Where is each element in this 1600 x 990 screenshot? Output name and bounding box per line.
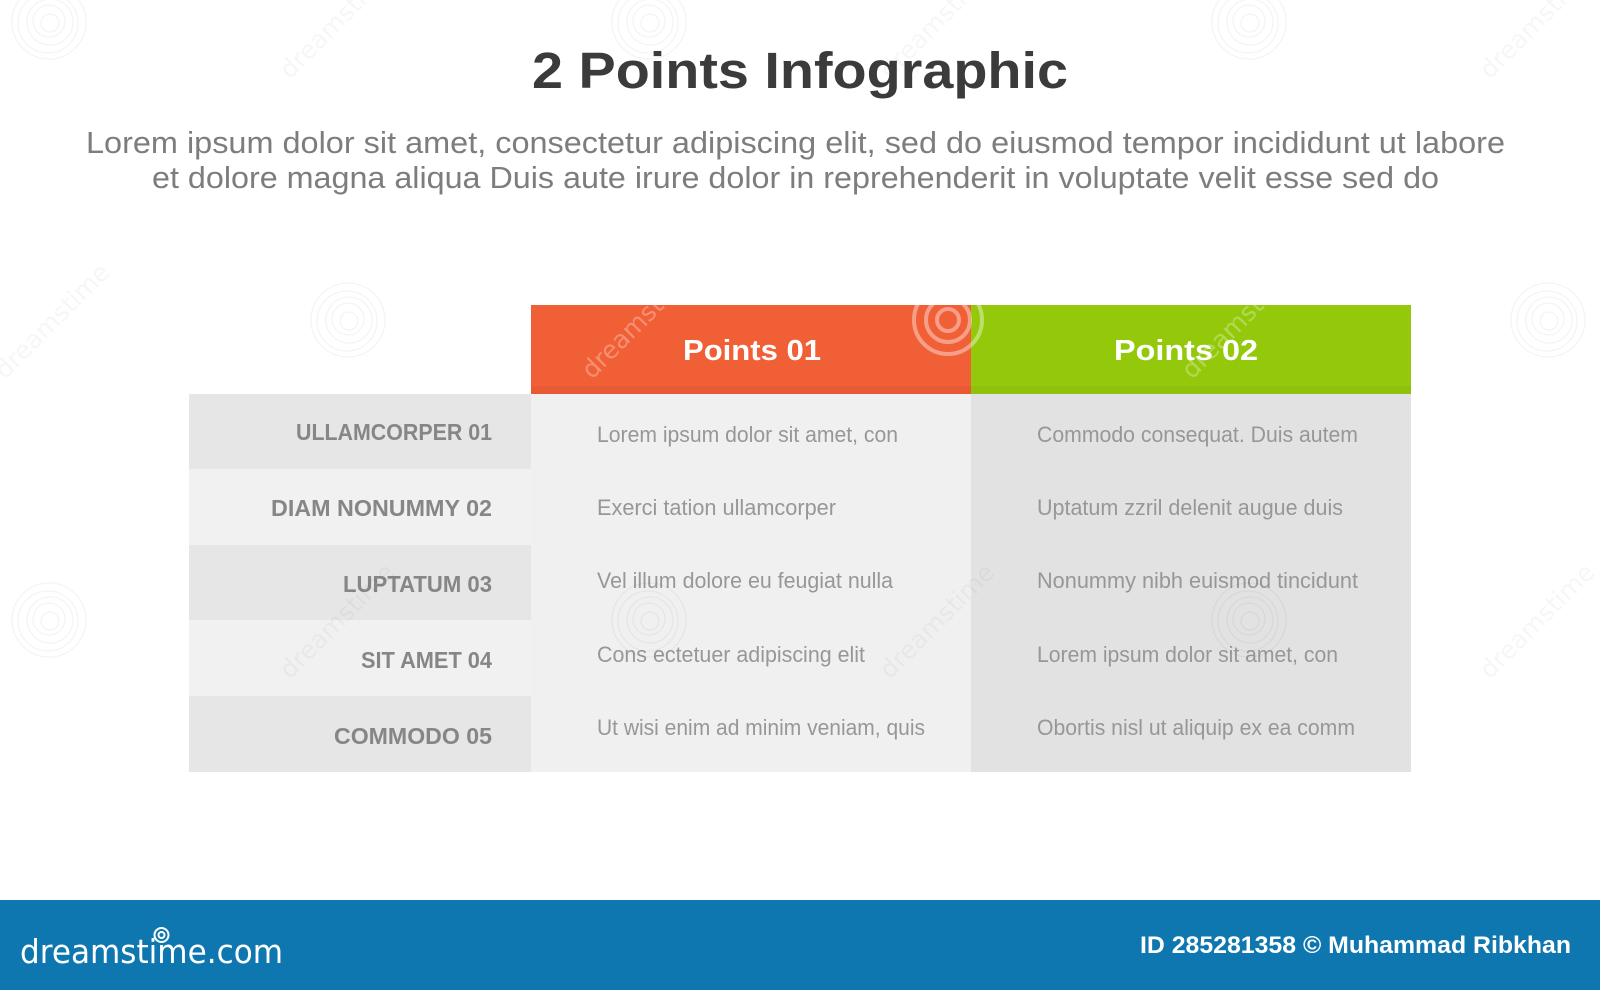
column: Points 01 text [597, 422, 925, 740]
title: 2 Points Infographic [532, 42, 1068, 99]
watermark [0, 0, 1600, 684]
footer bar [0, 900, 1600, 990]
column: Points 02 text: Obortis nisl ut aliquip ex ea comm [1037, 715, 1355, 740]
column: Points 01 text: Ut wisi enim ad minim veniam, quis [597, 715, 925, 740]
header: Points 01: Points 01 [683, 335, 821, 367]
row labels: ULLAMCORPER 01 [296, 419, 492, 445]
column: Points 02 text: Lorem ipsum dolor sit amet, con [1037, 642, 1338, 667]
subtitle: Lorem ipsum dolor sit amet, consectetur adipiscing elit, sed do eiusmod tempor incididunt ut labore [86, 125, 1505, 160]
watermark: dreamstime [1474, 558, 1600, 684]
subtitle: et dolore magna aliqua Duis aute irure dolor in reprehenderit in voluptate velit esse sed do [152, 160, 1439, 195]
watermark: dreamstime [274, 558, 400, 684]
column: Points 01 text: Exerci tation ullamcorper [597, 495, 836, 520]
row labels [271, 419, 492, 749]
watermark: dreamstime [1176, 258, 1302, 384]
header: Points 01 [531, 305, 971, 394]
header: Points 02 [971, 305, 1411, 394]
row labels: COMMODO 05 [334, 723, 492, 749]
column: Points 01 text: Cons ectetuer adipiscing elit [597, 642, 866, 667]
header: Points 02: Points 02 [1114, 335, 1258, 367]
watermark: dreamstime [576, 258, 702, 384]
row labels: DIAM NONUMMY 02 [271, 495, 492, 521]
table body [189, 394, 1411, 772]
column: Points 02 text: Commodo consequat. Duis autem [1037, 422, 1358, 447]
row labels: LUPTATUM 03 [343, 571, 492, 597]
watermark: dreamstime [874, 558, 1000, 684]
footer credit: ID 285281358 © Muhammad Ribkhan [1140, 932, 1571, 959]
column: Points 02 text [1037, 422, 1359, 740]
column: Points 01 text: Vel illum dolore eu feugiat nulla [597, 568, 893, 593]
row labels: SIT AMET 04 [361, 647, 492, 673]
column: Points 02 text: Nonummy nibh euismod tincidunt [1037, 568, 1359, 593]
subtitle [86, 125, 1505, 195]
column: Points 02 text: Uptatum zzril delenit augue duis [1037, 495, 1343, 520]
footer logo: dreamstime.com [20, 932, 283, 971]
column: Points 01 text: Lorem ipsum dolor sit amet, con [597, 422, 898, 447]
